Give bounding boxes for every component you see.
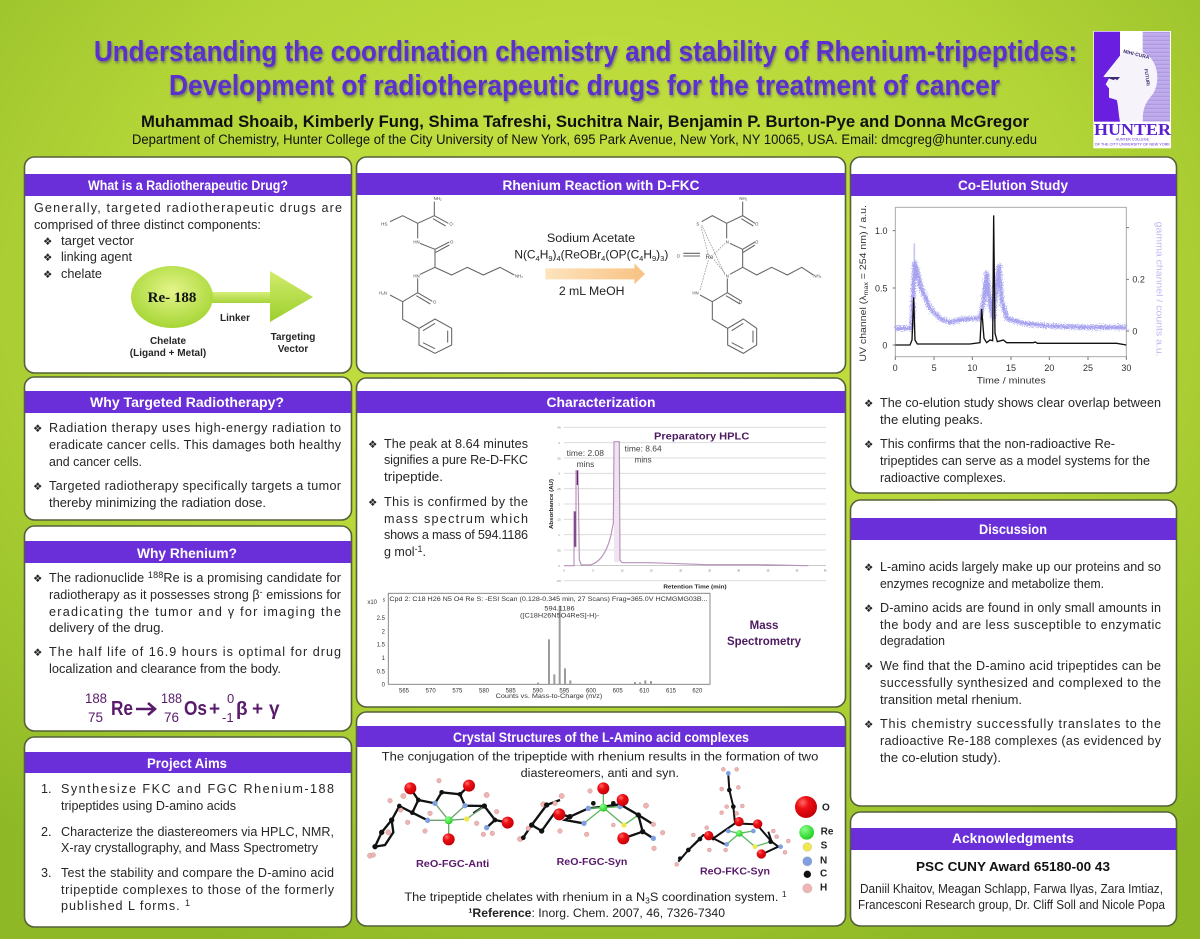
chart: preparatory HPLC: 25 [708,571,712,573]
heading: Why Rhenium?: Why Rhenium? [137,546,237,561]
diagram: drug components: (Ligand + Metal) [130,348,206,359]
chemical structure: D-FKC tripeptide: HN [413,273,420,278]
chart: co-elution: 0 [893,363,898,373]
chart: preparatory HPLC: Preparatory HPLC [654,431,750,442]
text block: thanks [858,882,1165,912]
text block: intro: ❖ [43,252,52,264]
text block: intro: target vector [61,234,134,248]
chart: preparatory HPLC: time: 8.64 [625,445,662,454]
reaction arrow with reagents: 4 [557,254,561,263]
chart: co-elution: gamma channel / counts a.u. [1155,222,1165,357]
diagram: drug components: Targeting [271,332,315,343]
label: Mass Spectrometry: Spectrometry [727,636,802,648]
molecule: ReO-FKC-Syn [675,767,790,866]
chart: mass spectrum: 590 [533,689,543,695]
chart: co-elution: 10 [967,363,977,373]
text block: intro: comprised of three distinct components: [34,218,261,232]
chart: preparatory HPLC: 4.5 [557,428,561,430]
text block: rhenium properties: The half life of 16.9 hours is optimal for drug [49,645,341,659]
reaction arrow with reagents: N(C [514,249,535,262]
equation: decay [85,690,280,725]
text block: co-elution findings: radioactive complexes. [880,471,1006,485]
text block: rhenium properties: ❖ [33,647,42,659]
text block: rhenium properties: ❖ [33,573,42,585]
chemical structure: D-FKC tripeptide [379,196,523,353]
legend: atoms: S [821,840,828,851]
text block: peak findings: This is confirmed by the [384,495,528,509]
equation: decay: + [209,699,220,720]
text block: aims list [41,782,335,913]
chemical structure: Re-D-FKC complex: O [677,253,681,258]
heading: Crystal Structures of the L-Amino acid complexes: Crystal Structures of the L-Amino acid complexes [453,730,749,745]
chemical structure: D-FKC tripeptide: NH₂ [515,274,523,279]
chart: preparatory HPLC: mins [577,460,594,469]
icon: Hunter College logo: FUTURI [1143,68,1151,86]
panel: Rhenium Reaction with D-FKC [356,157,846,373]
text block: discussion points: This chemistry successfully translates to the [880,717,1161,731]
text block: co-elution findings: tripeptides can serve as a model systems for the [880,454,1150,468]
chart: co-elution: 0 [1132,326,1137,336]
chart: mass spectrum: 575 [452,689,463,695]
chart: co-elution [858,205,1165,385]
chart: mass spectrum: 5 [383,598,386,603]
text block: aims list: Synthesize FKC and FGC Rhenium-188 [61,782,334,796]
text block: rhenium properties: eradicating the tumor and γ for imaging the [49,605,341,619]
text block: peak findings: mass spectrum which [384,512,528,526]
legend: atoms: H [820,882,827,893]
chemical structure: Re-D-FKC complex: O [755,239,759,244]
text block: peak findings: ❖ [368,439,377,451]
text block: co-elution findings: the eluting peaks. [880,413,983,427]
legend: atoms: Re [821,826,834,837]
chart: co-elution: 20 [1044,363,1054,373]
panel: Why Targeted Radiotherapy? [24,377,352,520]
text block: rhenium properties: delivery of the drug. [49,621,164,635]
chart: preparatory HPLC: 0.5 [557,550,561,552]
chart: preparatory HPLC: 15 [650,571,653,573]
molecule labels: ReO-FGC-Syn [557,857,627,868]
text block: rhenium properties: 188 [148,570,163,580]
chart: preparatory HPLC: mins [635,456,652,465]
text block: discussion points: the body and are less susceptible to enzymatic [880,618,1161,632]
text block: thanks: Francesconi Research group, Dr. Cliff Soll and Nicole Popa [858,898,1165,912]
text block: conjugation: The conjugation of the tripeptide with rhenium results in the formation of two [382,750,819,764]
label: Mass Spectrometry [727,620,802,648]
text block: discussion points: ❖ [864,719,873,731]
chemical structure: D-FKC tripeptide: O [450,239,454,244]
chart: preparatory HPLC: Retention Time (min) [663,584,727,590]
legend: atoms [795,796,834,893]
text block: radiation: thereby minimizing the radiation dose. [49,496,266,510]
chart: co-elution: 0.5 [875,283,887,293]
chart: co-elution: 0.2 [1132,275,1145,285]
heading: Rhenium Reaction with D-FKC: Rhenium Reaction with D-FKC [502,178,700,193]
reaction arrow with reagents: 4 [536,254,540,263]
title: Development of radiotherapeutic drugs for the treatment of cancer [169,70,1000,102]
reaction arrow with reagents: 9 [548,254,553,263]
chart: mass spectrum: 0 [382,682,386,688]
equation: decay: + [252,699,263,720]
chart: co-elution: max [864,282,870,295]
chart: preparatory HPLC: 40 [796,571,799,573]
chart: mass spectrum: 615 [666,689,677,695]
text block: aims list: 3. [41,866,52,880]
chart: mass spectrum: 570 [426,689,436,695]
reaction arrow with reagents: ) [553,249,557,262]
panel: What is a Radiotherapeutic Drug? [24,157,352,373]
chemical structure: Re-D-FKC complex: O [755,222,759,227]
heading: Why Targeted Radiotherapy?: Why Targeted Radiotherapy? [90,395,284,410]
text block: discussion points [864,560,1162,765]
equation: decay: β [236,699,248,720]
label: Mass Spectrometry: Mass [750,620,778,632]
text block: co-elution findings: ❖ [864,439,873,451]
reaction arrow with reagents: 4 [639,254,643,263]
heading: What is a Radiotherapeutic Drug?: What is a Radiotherapeutic Drug? [88,178,288,193]
text block: aims list: 1. [41,782,52,796]
text block: discussion points: transition metal rhenium. [880,693,1022,707]
reaction arrow with reagents: 2 mL MeOH [559,284,624,298]
diagram: drug components [130,266,315,359]
panel: Characterization [356,378,846,707]
text block: peak findings: tripeptide. [384,470,443,484]
text block: aims list: 1 [185,898,190,908]
chart: mass spectrum: 605 [613,689,623,695]
icon: Hunter College logo [1093,31,1172,148]
reaction arrow with reagents: 3 [660,254,664,263]
reaction arrow with reagents: H [540,249,548,262]
text block: peak findings: ❖ [368,497,377,509]
heading: Acknowledgments: Acknowledgments [952,831,1074,846]
legend: atoms: O [822,803,830,814]
text block: radiation [33,421,342,510]
diagram: drug components: Re- 188 [148,290,196,306]
chart: co-elution: = 254 nm) / a.u. [858,205,868,282]
heading: Co-Elution Study: Co-Elution Study [958,178,1068,193]
chart: preparatory HPLC: 35 [767,571,770,573]
reaction arrow with reagents [514,231,668,298]
text block: radiation: and cancer cells. [49,455,142,469]
panel: Co-Elution Study [850,157,1176,493]
panel: Why Rhenium? [24,526,352,731]
chemical structure: D-FKC tripeptide: H₂N [379,291,387,296]
text block: co-elution findings: The co-elution study shows clear overlap between [880,396,1161,410]
text block: coordination and reference [404,890,787,920]
chart: mass spectrum: 620 [692,689,703,695]
chart: mass spectrum: ([C18H26N5O4ReS]-H)- [520,613,599,619]
chemical structure: Re-D-FKC complex: NH₂ [739,196,748,201]
chart: preparatory HPLC: 5 [592,571,594,573]
chart: preparatory HPLC: 1.5 [557,520,561,522]
text block: rhenium properties: localization and clearance from the body. [49,662,281,676]
text block: co-elution findings [864,396,1161,485]
reaction arrow with reagents: 4 [601,254,605,263]
equation: decay: Re [111,698,133,720]
equation: decay: 75 [88,709,103,725]
text block: radiation: eradicate cancer cells. This damages both healthy [49,438,342,452]
text block: coordination and reference: ¹Reference: Inorg. Chem. 2007, 46, 7326-7340 [468,906,725,920]
icon: Hunter College logo: HUNTER COLLEGE [1116,137,1150,141]
chart: mass spectrum: 2.5 [377,616,386,622]
equation: decay: 0 [227,691,234,706]
chart: co-elution: 5 [932,363,937,373]
text block: co-elution findings: This confirms that the non-radioactive Re- [880,437,1115,451]
chart: mass spectrum: 610 [639,689,650,695]
panel: Acknowledgments [850,812,1176,926]
chart: mass spectrum: 580 [479,689,490,695]
chart: mass spectrum: 2 [382,629,386,635]
text block: peak findings: The peak at 8.64 minutes [384,437,528,451]
reaction arrow with reagents: Sodium Acetate [547,231,636,245]
molecule labels: ReO-FGC-Anti [416,859,490,870]
text block: aims list: X-ray crystallography, and Mass Spectrometry [61,841,319,855]
text block: discussion points: successfully synthesized and complexed to the [880,676,1161,690]
text block: peak findings: -1 [415,544,423,554]
panel: Discussion [850,500,1176,806]
text block: coordination and reference: The tripeptide chelates with rhenium in a N [404,890,631,904]
reaction arrow with reagents: ) [664,249,668,262]
text block: discussion points: ❖ [864,603,873,615]
legend: atoms: N [820,855,827,866]
molecule: ReO-FGC-Anti [367,778,514,858]
chart: preparatory HPLC: 30 [737,571,741,573]
chart: co-elution: 1.0 [875,226,887,236]
chemical structure: Re-D-FKC complex: O [739,299,743,304]
text block: conjugation [382,750,819,780]
text block: intro: Generally, targeted radiotherapeutic drugs are [34,201,342,215]
chart: mass spectrum: 585 [506,689,516,695]
chart: preparatory HPLC: 3 [558,474,560,476]
heading: Characterization: Characterization [546,395,656,410]
text block: rhenium properties [33,570,341,676]
text block: intro: ❖ [43,236,52,248]
chart: preparatory HPLC: time: 2.08 [567,449,605,458]
text block: intro: chelate [61,267,102,281]
panel: Crystal Structures [356,712,846,926]
reaction arrow with reagents: (ReOBr [561,249,601,262]
chemical structure: Re-D-FKC complex: S [696,222,699,227]
chart: preparatory HPLC [549,427,827,590]
heading: Project Aims: Project Aims [147,756,227,771]
chemical structure: D-FKC tripeptide: O [433,299,437,304]
text block: discussion points: ❖ [864,562,873,574]
text block: discussion points: the co-elution study). [880,751,1001,765]
chemical structure: D-FKC tripeptide: HN [413,239,420,244]
title [94,36,1077,102]
text block: aims list: 2. [41,825,52,839]
chemical structure: Re-D-FKC complex: N [726,239,729,244]
chart: preparatory HPLC: Absorbance (AU) [549,479,555,529]
chart: mass spectrum: 595 [559,689,570,695]
reaction arrow with reagents: ) [656,249,660,262]
diagram: drug components: Chelate [150,336,186,347]
chart: preparatory HPLC: 20 [679,571,683,573]
text block: thanks: Daniil Khaitov, Meagan Schlapp, Farwa Ilyas, Zara Imtiaz, [860,882,1163,896]
chart: preparatory HPLC: 0 [563,571,565,573]
text block: aims list: Characterize the diastereomers via HPLC, NMR, [61,825,334,839]
chemical structure: Re-D-FKC complex [677,196,822,353]
text block: aims list: tripeptide complexes to those of the formerly [61,883,335,897]
reaction arrow with reagents: 9 [652,254,656,263]
text block: discussion points: enzymes recognize and metabolize them. [880,577,1104,591]
text block: radiation: ❖ [33,423,42,435]
text block: peak findings [368,437,528,559]
text block: peak findings: signifies a pure Re-D-FKC [384,453,528,467]
chart: mass spectrum: 1 [382,656,386,662]
chart: mass spectrum: x10 [367,600,378,606]
text block: radiation: ❖ [33,481,42,493]
molecule labels: ReO-FKC-Syn [700,866,770,877]
text block: aims list: published L forms. [61,899,180,913]
chemical structure: Re-D-FKC complex: HN [692,291,699,296]
chart: preparatory HPLC: 4 [558,443,560,445]
text block: co-elution findings: ❖ [864,398,873,410]
chart: co-elution: Time / minutes [977,375,1046,385]
text block: discussion points: degradation [880,634,945,648]
text block: discussion points: We find that the D-amino acid tripeptides can be [880,659,1161,673]
text block: discussion points: ❖ [864,661,873,673]
text block: aims list: tripeptides using D-amino acids [61,799,236,813]
chart: co-elution: 15 [1006,363,1016,373]
text block: coordination and reference: 1 [782,890,787,899]
text block: intro [34,201,342,281]
molecule: ReO-FGC-Syn [517,782,665,851]
text block: rhenium properties: Re is a promising candidate for [163,571,341,585]
reaction arrow with reagents: (OP(C [605,249,639,262]
chemical structure: D-FKC tripeptide: NH₂ [434,196,442,201]
chart: mass spectrum: Counts vs. Mass-to-Charge (m/z) [496,694,602,700]
text block: conjugation: diastereomers, anti and syn. [521,766,679,780]
equation: decay: 188 [161,690,182,706]
chart: preparatory HPLC: 2 [558,504,560,506]
text block: rhenium properties: - [260,587,263,597]
text block: award: PSC CUNY Award 65180-00 43 [916,860,1110,874]
text block: rhenium properties: The radionuclide [49,571,144,585]
icon: Hunter College logo: MIHI·CURA [1123,49,1150,61]
icon: Hunter College logo: HUNTER [1094,120,1172,139]
diagram: drug components: Vector [278,344,308,355]
chart: preparatory HPLC: 1 [558,535,560,537]
chart: preparatory HPLC: 10 [621,571,624,573]
title: Understanding the coordination chemistry and stability of Rhenium-tripeptides: [94,36,1077,68]
icon: Hunter College logo: OF THE CITY UNIVERSITY OF NEW YORK [1095,143,1171,147]
chart: mass spectrum: 0.5 [377,669,386,675]
chart: co-elution: 25 [1083,363,1093,373]
chart: preparatory HPLC: 3.5 [557,458,561,460]
chart: mass spectrum: 600 [586,689,597,695]
text block: radiation: Radiation therapy uses high-energy radiation to [49,421,341,435]
chemical structure: Re-D-FKC complex: N [726,273,729,278]
chemical structure: D-FKC tripeptide: HS [381,222,387,227]
chemical structure: Re-D-FKC complex: NH₂ [813,274,822,279]
chart: co-elution: 0 [882,340,887,350]
chart: mass spectrum [367,593,710,700]
molecule labels [416,857,770,877]
text block: peak findings: . [423,545,426,559]
chart: mass spectrum: 565 [399,689,410,695]
chemical structure: Re-D-FKC complex: Re [706,255,714,261]
text block: aims list: Test the stability and compare the D-amino acid [61,866,334,880]
text block: coordination and reference: S coordination system. [650,890,782,904]
text block: radiation: Targeted radiotherapy specifically targets a tumor [49,479,341,493]
text block: rhenium properties: emissions for [263,588,341,602]
equation: decay: -1 [222,710,234,725]
chart: preparatory HPLC: -0.5 [557,581,561,583]
equation: decay: 76 [164,709,179,725]
text block: rhenium properties: radiotherapy as it possesses strong β [49,588,260,602]
heading: Discussion: Discussion [979,522,1047,537]
equation: decay: γ [269,699,280,720]
text block: intro: ❖ [43,269,52,281]
affiliation: Department of Chemistry, Hunter College of the City University of New York, 695 Park Avenue, New York, NY 10065, USA. Email: dmcgreg@hunter.cuny.edu [132,132,1037,147]
chart: preparatory HPLC: 2.5 [557,489,561,491]
chart: mass spectrum: Cpd 2: C18 H26 N5 O4 Re S: -ESI Scan (0.128-0.345 min, 27 Scans) Frag=365.0V HCMGMG03B... [389,597,708,603]
chart: co-elution: UV channel (λ [858,305,868,362]
text block: intro: linking agent [61,250,133,264]
chemical structure: D-FKC tripeptide: O [449,222,453,227]
text block: discussion points: radioactive Re-188 complexes (as evidenced by [880,734,1162,748]
reaction arrow with reagents: H [643,249,652,262]
equation: decay: Os [184,698,207,720]
authors: Muhammad Shoaib, Kimberly Fung, Shima Tafreshi, Suchitra Nair, Benjamin P. Burton-Pye and Donna McGregor [141,113,1030,131]
text block: peak findings: shows a mass of 594.1186 [384,528,528,542]
chart: preparatory HPLC: 45 [824,571,827,573]
text block: peak findings: g mol [384,545,415,559]
panel: Project Aims [24,737,352,927]
chart: mass spectrum: 1.5 [377,643,386,649]
text block: coordination and reference: 3 [645,897,650,906]
chart: co-elution: 30 [1121,363,1131,373]
text block: discussion points: L-amino acids largely make up our proteins and so [880,560,1161,574]
chart: mass spectrum: 594.1186 [544,606,575,612]
chart: preparatory HPLC: 0 [558,566,560,568]
diagram: drug components: Linker [220,313,250,324]
equation: decay: 188 [85,690,107,706]
text block: discussion points: D-amino acids are found in only small amounts in [880,601,1161,615]
legend: atoms: C [820,869,827,880]
